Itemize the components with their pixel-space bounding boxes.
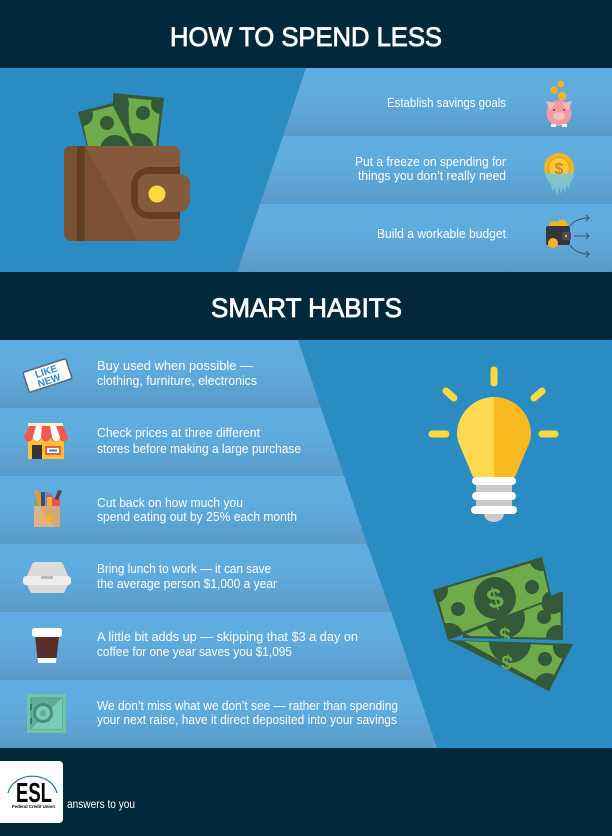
text: check prices (97, 426, 301, 456)
icon: store (24, 423, 68, 459)
icon: dollar bills (433, 557, 573, 691)
text: answers to you: answers to you (67, 799, 135, 811)
text: cut back: spend eating out by 25% each month (97, 510, 297, 524)
text: put a freeze on spending: Put a freeze on spending for (355, 155, 506, 169)
text: cut back: Cut back on how much you (97, 496, 243, 510)
icon: light bulb (432, 370, 555, 522)
text: buy used (97, 359, 257, 388)
icon: frozen coin (544, 153, 574, 196)
text: build a workable budget: Build a workable budget (377, 227, 506, 241)
text: we don't miss (97, 699, 398, 727)
text: a little bit: A little bit adds up — skipping that $3 a day on (97, 630, 358, 644)
icon: coffee cup (32, 628, 62, 663)
text: buy used: clothing, furniture, electronics (97, 374, 257, 388)
text: bring lunch: the average person $1,000 a year (97, 577, 277, 591)
logo: ESL: ESL (16, 777, 52, 808)
text: we don't miss: your next raise, have it direct deposited into your savings (97, 713, 397, 727)
text: we don't miss: We don’t miss what we don’t see — rather than spending (97, 699, 398, 713)
logo: ESL: Federal Credit Union (12, 804, 55, 809)
icon: piggy bank (546, 81, 572, 127)
text: a little bit: coffee for one year saves you $1,095 (97, 645, 292, 659)
text: establish savings goals: Establish savings goals (387, 96, 506, 110)
icon: dollar bills: $ (484, 581, 507, 615)
icon: like new tag: NEW (37, 372, 63, 390)
text: bring lunch (97, 562, 277, 591)
logo: ESL (0, 761, 63, 823)
icon: like new tag: LIKE (34, 363, 59, 381)
text: cut back (97, 496, 297, 524)
icon: takeout container (23, 562, 71, 593)
icon: like new tag (23, 359, 72, 393)
text: a little bit (97, 630, 358, 659)
text: bring lunch: Bring lunch to work — it can save (97, 562, 271, 576)
icon: wallet with cash (64, 93, 190, 241)
icon: grocery bag (33, 490, 62, 527)
icon: frozen coin: $ (555, 161, 564, 178)
title: how to spend less: HOW TO SPEND LESS (170, 22, 442, 52)
panel: smart habits (0, 340, 612, 748)
icon: dollar bills: $ (499, 623, 511, 645)
text: put a freeze on spending (355, 155, 506, 183)
panel: how to spend less (0, 68, 612, 272)
text: check prices: stores before making a large purchase (97, 442, 301, 456)
text: buy used: Buy used when possible — (97, 359, 254, 373)
icon: dollar bills: $ (500, 650, 514, 674)
text: check prices: Check prices at three different (97, 426, 261, 440)
title: smart habits: SMART HABITS (211, 293, 402, 323)
icon: wallet with arrows (546, 215, 589, 257)
icon: safe (27, 694, 66, 733)
text: put a freeze on spending: things you don’t really need (358, 169, 506, 183)
